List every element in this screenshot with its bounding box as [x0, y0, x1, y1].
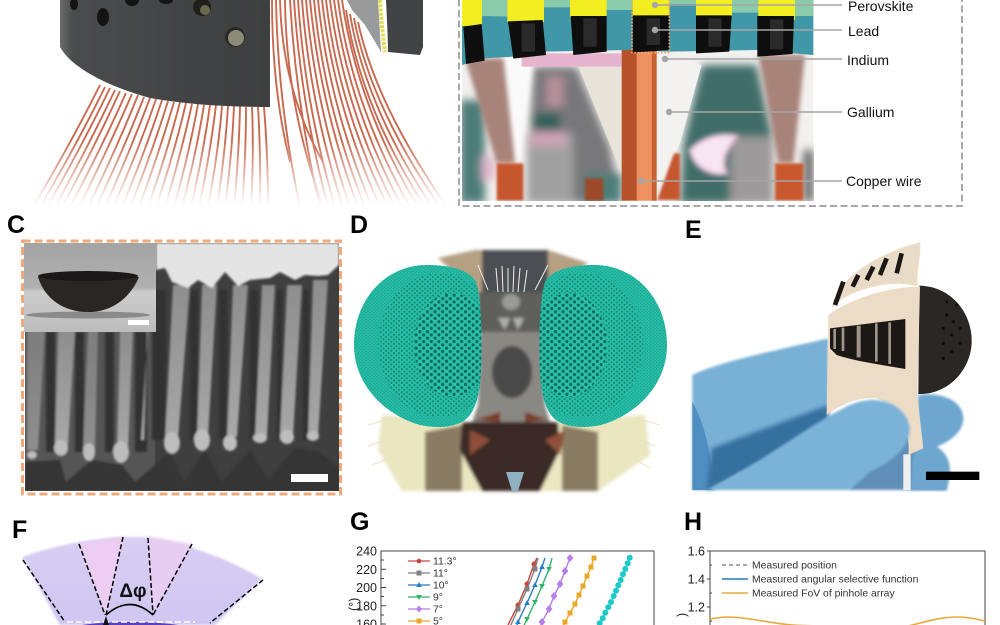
black hemisphere [918, 286, 972, 394]
callout: Gallium [666, 104, 894, 120]
lower cable window [830, 319, 905, 369]
dome shell [60, 0, 270, 107]
dark gaps [46, 290, 309, 452]
bristles [478, 265, 548, 292]
dashed white crop [67, 621, 195, 623]
glove palm [692, 338, 828, 490]
side hairs [368, 418, 660, 468]
pixel mesh [347, 0, 381, 52]
yellow perovskite blocks [462, 0, 795, 26]
pink wedge left [79, 537, 123, 615]
series 10° [515, 558, 545, 625]
left compound eye [350, 260, 502, 432]
panel label D: D [350, 211, 368, 239]
nanowire beads [27, 429, 319, 463]
black lead blocks [463, 15, 794, 64]
pillar caps [156, 243, 339, 288]
y ticks [381, 551, 386, 624]
copper wires, right bundle [272, 0, 447, 207]
cream flexible sheet [827, 287, 923, 455]
series 5° [562, 556, 596, 625]
perovskite strip [380, 0, 385, 52]
panel A: hemispherical device with copper wires [0, 0, 458, 212]
rear fingers [910, 394, 963, 490]
series cyan [597, 555, 633, 625]
legend: Measured FoV of pinhole array [752, 588, 895, 600]
legend: Measured angular selective function [752, 574, 919, 586]
legend: Measured position [752, 560, 837, 572]
legend [722, 560, 919, 600]
white gap beside left cone [506, 58, 534, 160]
top window cable bars [835, 253, 902, 305]
legend: 11° [433, 568, 448, 580]
panel H: measured function chart [675, 544, 985, 625]
series 9° [522, 558, 552, 625]
wire fade-out [0, 140, 458, 212]
callout: Copper wire [638, 173, 922, 189]
front finger [707, 400, 910, 490]
SEM micrograph [25, 243, 339, 491]
head [378, 250, 650, 491]
y tick labels: 220 [356, 563, 377, 577]
cut-away shell piece [386, 0, 423, 55]
y tick labels [688, 544, 705, 614]
dashed sight lines [23, 537, 263, 623]
callout: Lead: Lead [848, 23, 879, 39]
y tick labels [356, 544, 377, 625]
plot frame [710, 551, 985, 625]
fan shape [22, 537, 262, 625]
series 11° [510, 558, 538, 625]
panel C: SEM nanowire image [22, 241, 340, 494]
panel label H: H [684, 508, 702, 536]
trailing ribbon [903, 454, 911, 490]
y tick labels: 240 [356, 544, 377, 558]
callout: Lead [652, 23, 879, 39]
pillars, right group [165, 280, 328, 440]
central copper wire [622, 50, 657, 201]
callout: Gallium: Gallium [847, 104, 894, 120]
pillars, left group [27, 330, 148, 450]
pink wedge right [148, 537, 192, 615]
panel D: insect compound eyes photo [350, 250, 671, 491]
series 7° [539, 554, 573, 625]
right compound eye [519, 260, 671, 432]
blurred backdrop [462, 50, 814, 201]
upper green layer and teal layer [462, 0, 813, 65]
y tick labels: 1.4 [688, 572, 705, 586]
dome holes [70, 0, 245, 47]
glove shadow [707, 405, 828, 490]
callout: Copper wire: Copper wire [846, 173, 922, 189]
inset bowl photo [24, 243, 156, 332]
SEM scale bar [291, 474, 328, 482]
brown cones [465, 58, 515, 163]
y tick labels: 1.2 [688, 600, 705, 614]
panel E: device held in gloved hand [692, 243, 979, 490]
dashed frame [459, 0, 962, 206]
window bright bars lower [833, 322, 891, 364]
legend [408, 556, 457, 625]
legend: 7° [433, 604, 443, 616]
panel G: line chart by angle [347, 544, 654, 625]
substrate streaks [25, 448, 339, 491]
callout: Indium [662, 52, 889, 68]
delta phi label: Δφ [119, 581, 147, 602]
tip marker [103, 616, 109, 625]
panel label C: C [7, 211, 25, 239]
callout: Perovskite [652, 0, 914, 14]
device dome [82, 622, 178, 625]
series 11.3° [508, 558, 537, 625]
FoV curve [710, 617, 985, 625]
legend: 9° [433, 592, 443, 604]
hemisphere pinholes [942, 300, 962, 360]
panel B: sensor pixel detail [459, 0, 962, 206]
y tick labels: 180 [356, 600, 377, 614]
inset scale bar [128, 320, 149, 325]
dashed orange frame [22, 241, 340, 494]
scale bar [926, 472, 979, 480]
plot frame [381, 551, 654, 625]
gap shading behind fingers [850, 432, 947, 490]
mouth parts [506, 472, 524, 491]
legend: 11.3° [433, 556, 457, 568]
y ticks [707, 551, 712, 621]
y tick labels: 200 [356, 581, 377, 595]
glove fold [692, 402, 712, 490]
panel label F: F [12, 516, 27, 544]
cream gallium wedge [578, 67, 622, 173]
photo region [460, 0, 813, 203]
dotted highlight of one pixel [632, 0, 669, 53]
y tick labels: 1.6 [688, 544, 705, 558]
callout: Indium: Indium [847, 52, 889, 68]
top curved window piece [833, 243, 919, 305]
copper stubs [497, 153, 803, 201]
y axis label: (°) [347, 598, 361, 611]
panel F: field-of-view fan diagram [22, 537, 263, 625]
y axis label: ) [675, 613, 689, 617]
angle arc [106, 604, 153, 615]
indium pad [522, 53, 622, 67]
panel label E: E [685, 216, 702, 244]
legend: 10° [433, 580, 449, 592]
panel label G: G [350, 508, 369, 536]
copper wires, left bundle [33, 85, 268, 207]
lead highlights [522, 18, 783, 52]
white gallium wedge [675, 64, 702, 152]
